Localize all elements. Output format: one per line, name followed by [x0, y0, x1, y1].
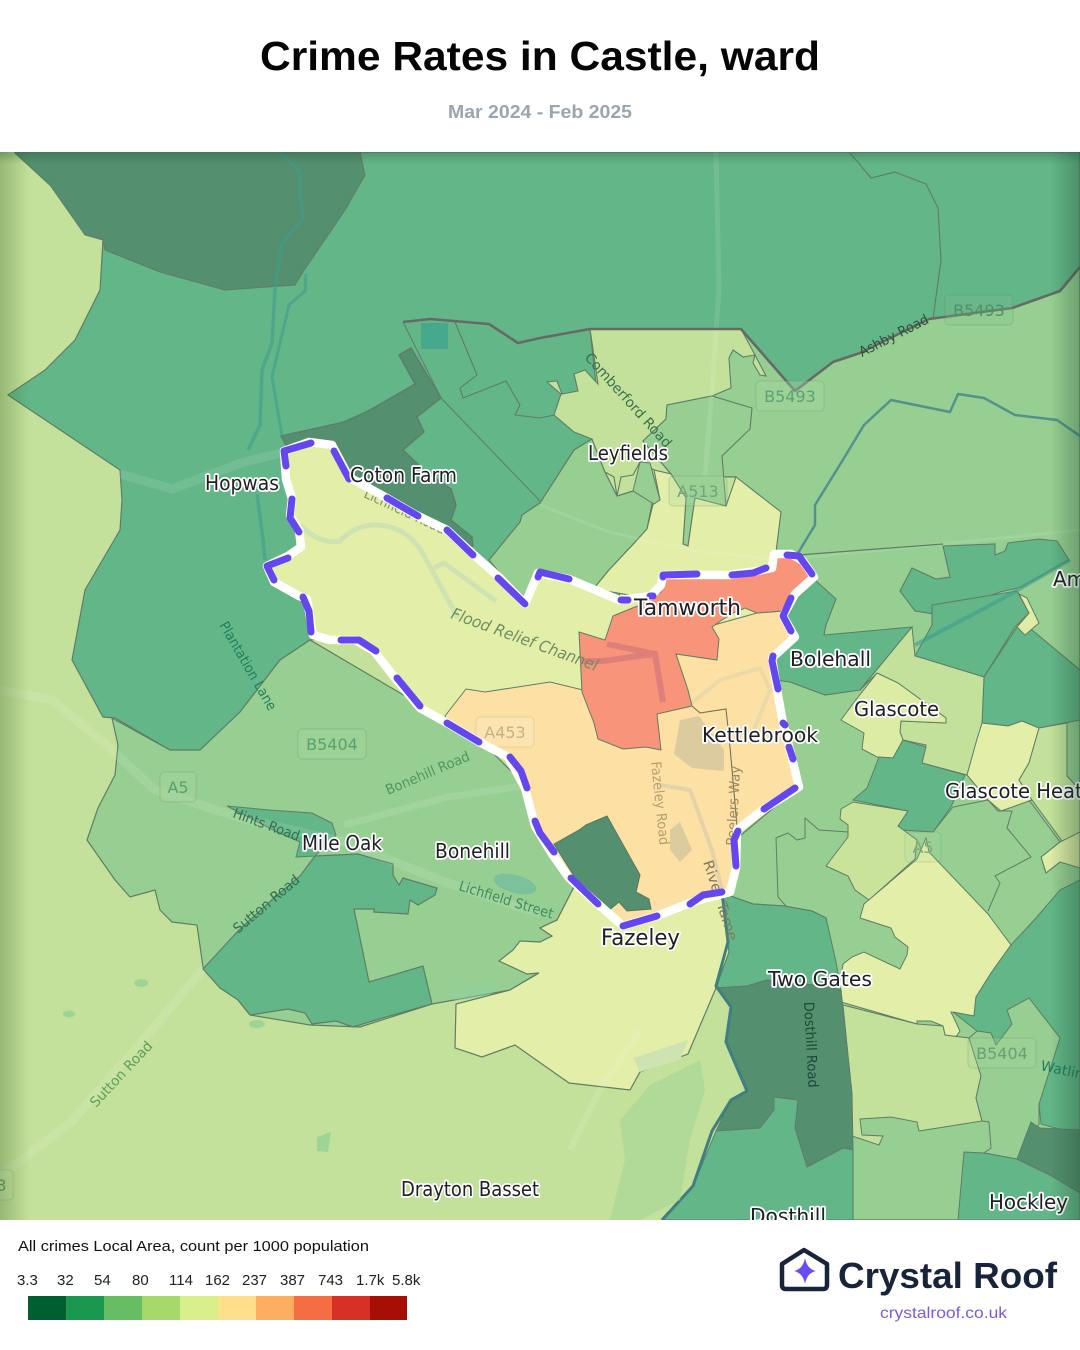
road shields: A5 — [167, 778, 189, 797]
region: Bolehall mid green — [771, 580, 912, 695]
region: north-east mid green A — [900, 539, 1069, 615]
road shields: B5493 — [953, 301, 1005, 320]
region: medium green south-west — [87, 640, 575, 1027]
road labels: Ashby Road — [857, 312, 932, 361]
place labels: Tamworth — [633, 596, 741, 621]
ward boundary: purple dashes — [267, 443, 812, 926]
place labels: Leyfields — [588, 441, 668, 465]
region: light green Glascote Heath east — [1019, 723, 1080, 845]
region: small green blob by Leyfields — [633, 462, 660, 504]
canal inside ward — [300, 525, 496, 618]
place labels: Bonehill — [435, 839, 510, 863]
road labels: Plantation Lane — [216, 619, 279, 714]
region: Two Gates east yellow — [840, 838, 1011, 1038]
ward boundary: white base line — [267, 442, 814, 926]
region: medium green west of Leyfields — [489, 439, 654, 600]
place labels: Kettlebrook — [702, 723, 818, 747]
region: Dosthill dark green — [716, 980, 853, 1167]
subtitle: date range: Mar 2024 - Feb 2025 — [448, 102, 632, 122]
region: Mile Oak mid green patch — [203, 854, 437, 1027]
region: medium green east patch — [969, 998, 1060, 1159]
road labels — [87, 312, 1080, 1111]
region: ward fill pale yellow — [272, 446, 756, 717]
region: Two Gates mid green — [716, 893, 841, 990]
region: large north-west mid green area — [8, 152, 1080, 750]
region: yellow sliver north-east — [1017, 594, 1039, 635]
region: Coton Farm dark green — [281, 348, 473, 546]
region: Fazeley yellow — [455, 885, 729, 1090]
legend scale labels — [17, 1272, 421, 1289]
title: Crime Rates in Castle, ward — [260, 33, 820, 79]
road labels: Dosthill Road — [800, 1001, 820, 1088]
legend colour bar — [28, 1296, 407, 1320]
place labels: Dosthill — [750, 1204, 826, 1228]
region: Dosthill south mid green — [662, 1097, 853, 1220]
road labels: Bonehill Road — [383, 749, 472, 799]
icon: house with star — [782, 1250, 827, 1289]
place labels: Bolehall — [790, 647, 871, 671]
legend scale labels: 1.7k — [356, 1272, 385, 1289]
road labels: Lichfield Street — [457, 879, 556, 923]
region: north-east mid green D — [982, 627, 1080, 728]
region: central medium green spur — [643, 396, 752, 546]
region: Hints Road mid green sliver — [227, 806, 336, 857]
region: mid green east of Glascote — [853, 740, 965, 832]
region: Leyfields light green — [547, 329, 766, 496]
place labels: Hopwas — [205, 471, 279, 495]
road shields: B5404 — [306, 735, 358, 754]
region: yellow patch Glascote Heath — [967, 721, 1039, 811]
choropleth map — [0, 152, 1080, 1228]
road shields: A5 — [912, 838, 934, 857]
legend scale labels: 5.8k — [392, 1272, 421, 1289]
road labels: Peelers Way — [724, 765, 744, 846]
region: north Tamworth yellow — [595, 470, 781, 600]
road labels: Fazeley Road — [647, 761, 672, 846]
roads — [0, 152, 1080, 1176]
place labels: Glascote — [854, 697, 939, 721]
region: ward peach area — [445, 611, 799, 926]
brand name: Crystal Roof — [838, 1255, 1058, 1296]
water: rivers, lakes and land patches — [63, 153, 1080, 1220]
region: mid green far east — [953, 880, 1080, 1135]
region: ward industrial patches — [660, 668, 770, 890]
legend scale labels: 162 — [205, 1272, 230, 1289]
road shields — [0, 295, 1036, 1200]
region: mid green south-east corner — [958, 1152, 1080, 1220]
region: dark green north-west — [15, 152, 365, 290]
place labels: Two Gates — [767, 967, 872, 991]
road labels: Comberford Road — [581, 350, 675, 451]
legend — [17, 1239, 421, 1320]
road labels: Lichfield Road — [361, 486, 448, 538]
region: light green north of Glascote — [860, 627, 984, 775]
region: light green south-east — [843, 1005, 982, 1145]
region: yellow far east — [1041, 832, 1080, 873]
legend scale labels: 387 — [280, 1272, 305, 1289]
road labels: Hints Road — [231, 806, 302, 845]
road shields: B5493 — [764, 387, 816, 406]
place labels: Mile Oak — [302, 831, 382, 855]
region: ward salmon area — [579, 554, 814, 750]
place labels: Hockley — [989, 1190, 1068, 1214]
legend scale labels: 80 — [132, 1272, 149, 1289]
region: north-east mid green B — [915, 591, 1029, 677]
region: eastern medium green base — [714, 269, 1080, 1220]
place labels: Drayton Basset — [401, 1177, 539, 1201]
legend scale labels: 3.3 — [17, 1272, 38, 1289]
road labels: River Tame — [699, 858, 740, 943]
road labels: Sutton Road — [87, 1038, 156, 1111]
legend title: All crimes Local Area, count per 1000 population — [18, 1239, 369, 1255]
legend scale labels: 54 — [94, 1272, 111, 1289]
legend scale labels: 237 — [242, 1272, 267, 1289]
road labels: Flood Relief Channel — [449, 604, 601, 675]
place labels: Fazeley — [601, 926, 680, 951]
region: dark green south-east corner — [1017, 1122, 1080, 1193]
website: crystalroof.co.uk — [880, 1305, 1008, 1322]
region: light green wedge south of A5 — [826, 802, 917, 900]
road in salmon area — [580, 644, 663, 702]
place labels: Coton Farm — [350, 463, 457, 487]
legend scale labels: 32 — [57, 1272, 74, 1289]
legend scale labels: 743 — [318, 1272, 343, 1289]
boundary lines — [403, 153, 1080, 911]
road shields: A453 — [484, 723, 526, 742]
region: Glascote yellow — [841, 673, 946, 758]
road shields: A513 — [677, 482, 719, 501]
map edge shading — [0, 152, 1080, 1220]
region: ward dark green enclave — [554, 816, 651, 912]
place labels — [205, 441, 1080, 1228]
legend scale labels: 114 — [169, 1272, 193, 1289]
road labels: Sutton Road — [230, 872, 303, 937]
road shields: B5404 — [976, 1044, 1028, 1063]
logo — [782, 1250, 1058, 1322]
